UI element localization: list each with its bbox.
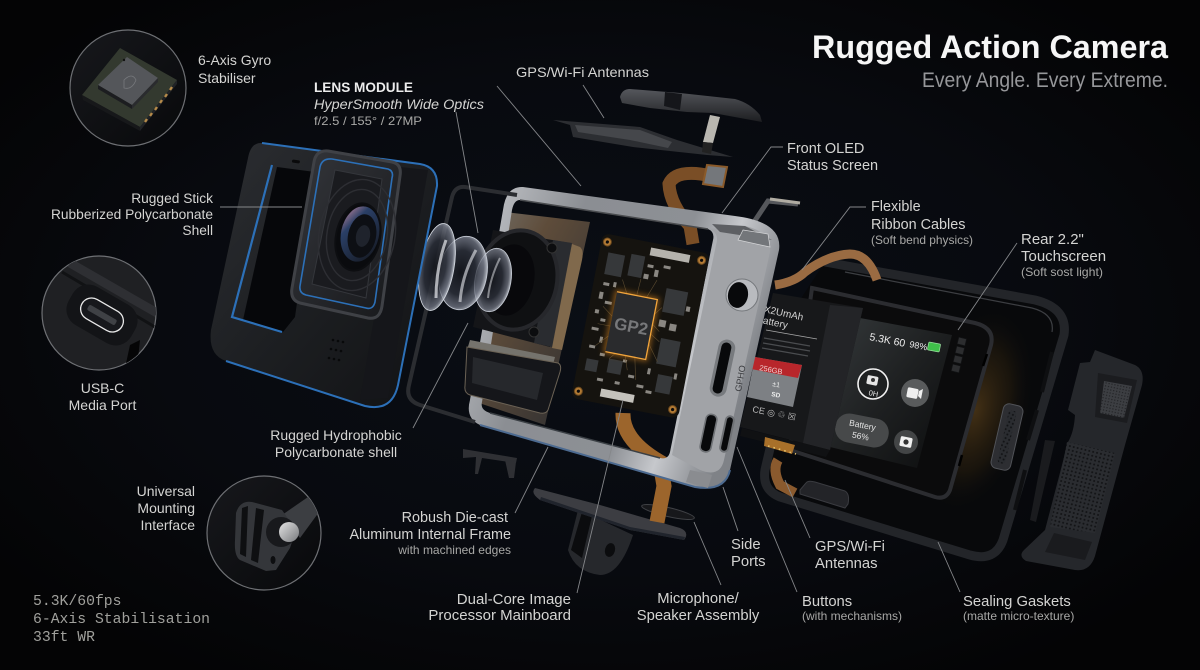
mic ring xyxy=(641,502,695,522)
spec list: 6-Axis Stabilisation xyxy=(33,612,210,628)
screen UI: status text: 5.3K 60 xyxy=(868,331,906,350)
aluminium frame xyxy=(469,187,779,488)
circuit traces xyxy=(588,271,673,383)
clip recess xyxy=(800,481,849,508)
compliance marks: CE ◎ ♲ ☒ xyxy=(752,404,797,422)
side door connector xyxy=(990,403,1024,471)
flex cable: lower xyxy=(623,413,664,522)
shell side band xyxy=(360,167,428,400)
spec list xyxy=(33,594,210,646)
spec list: 5.3K/60fps xyxy=(33,594,122,610)
label: touchscreen: Rear 2.2" xyxy=(1021,231,1084,248)
label: touchscreen xyxy=(1021,231,1106,279)
screen UI: battery pill: Battery xyxy=(848,418,877,433)
label: ribbon cables: Ribbon Cables xyxy=(871,217,965,233)
memory card: ±1 xyxy=(772,381,781,389)
label: side ports: Side xyxy=(731,537,761,553)
lower antenna xyxy=(553,120,733,157)
label: internal frame: Aluminum Internal Frame xyxy=(349,527,511,543)
label: GPS antennas bottom: GPS/Wi-Fi xyxy=(815,539,885,555)
connectors xyxy=(650,247,690,263)
spec list: 33ft WR xyxy=(33,630,95,646)
label: USB-C: Media Port xyxy=(69,397,136,413)
front gasket xyxy=(408,187,517,422)
screen UI: green battery xyxy=(927,342,941,352)
label: microphone: Microphone/ xyxy=(657,591,740,607)
label: internal frame xyxy=(349,510,511,557)
main lens xyxy=(329,199,387,275)
screen UI: battery percent: 98% xyxy=(909,339,928,352)
label: lens module xyxy=(314,79,484,128)
metal clip xyxy=(750,199,800,228)
label: front OLED: Status Screen xyxy=(787,158,878,174)
processor chip: GP2 xyxy=(613,314,650,339)
ICs xyxy=(583,249,695,395)
flex cable: top xyxy=(669,165,727,244)
label: lens module: HyperSmooth Wide Optics xyxy=(314,96,484,112)
label: rugged stick shell: Rugged Stick xyxy=(131,191,213,206)
screen UI: shutter ring xyxy=(858,369,888,399)
label: touchscreen: (Soft sost light) xyxy=(1021,265,1103,279)
battery foot xyxy=(740,428,830,457)
label: mounting: Mounting xyxy=(137,500,195,516)
upper antenna xyxy=(620,89,762,122)
screen UI: shutter ring: 0H xyxy=(868,388,879,399)
label: lens module: f/2.5 / 155° / 27MP xyxy=(314,114,422,128)
OLED module xyxy=(465,340,561,413)
screen display xyxy=(830,318,952,468)
small clip part xyxy=(463,449,517,478)
subtitle: Every Angle. Every Extreme. xyxy=(922,69,1168,92)
SMD parts xyxy=(581,254,697,398)
label: mainboard: Processor Mainboard xyxy=(428,607,571,624)
label: GPS antennas bottom: Antennas xyxy=(815,556,878,572)
rear shell frame xyxy=(765,262,1064,557)
side door grip xyxy=(1021,350,1143,570)
label: side ports: Ports xyxy=(731,554,766,570)
mounting holes xyxy=(574,237,706,414)
OLED display xyxy=(472,357,543,400)
lower connector xyxy=(600,389,635,403)
label: internal frame: Robush Die-cast xyxy=(402,510,508,526)
label: USB-C: USB-C xyxy=(81,380,124,396)
label: gyro: Stabiliser xyxy=(198,70,256,86)
mainboard xyxy=(571,233,710,419)
label: front OLED: Front OLED xyxy=(787,141,864,157)
label: microphone: Speaker Assembly xyxy=(637,608,760,624)
label: ribbon cables: Flexible xyxy=(871,199,921,215)
screen UI: battery pill xyxy=(833,411,891,450)
processor chip xyxy=(603,289,660,362)
flex cable: lower antenna xyxy=(764,437,796,493)
memory card: SD xyxy=(771,391,781,400)
lens element stack xyxy=(413,221,516,315)
memory card: 256GB xyxy=(759,363,783,376)
label: mounting: Universal xyxy=(137,483,195,499)
frame bottom lug xyxy=(686,470,712,488)
lens block xyxy=(292,151,404,318)
screen UI: battery pill: 56% xyxy=(851,430,870,443)
label: gyro: 6-Axis Gyro xyxy=(198,52,271,68)
label: mounting: Interface xyxy=(141,517,195,533)
sensor module xyxy=(465,223,583,413)
label: lens module: LENS MODULE xyxy=(314,79,413,95)
label: sealing gaskets: Sealing Gaskets xyxy=(963,594,1071,610)
rear touchscreen xyxy=(790,288,992,498)
label: rugged stick shell: Rubberized Polycarbonate xyxy=(51,207,213,222)
frame hole xyxy=(726,279,758,311)
label: rugged stick shell: Shell xyxy=(182,223,213,238)
battery label: 5X2UmAh xyxy=(757,303,804,323)
label: sealing gaskets: (matte micro-texture) xyxy=(963,609,1074,623)
USB-C slot xyxy=(708,338,737,398)
GPS antennas xyxy=(553,89,762,157)
screen UI: camera button xyxy=(894,430,918,454)
label: hydrophobic shell: Polycarbonate shell xyxy=(275,444,397,460)
inset: mounting interface xyxy=(207,476,322,590)
shell window xyxy=(243,167,315,332)
label: ribbon cables: (Soft bend physics) xyxy=(871,233,973,247)
battery label line 2: Battery xyxy=(755,314,789,332)
label: buttons xyxy=(802,594,902,623)
screen side buttons xyxy=(951,337,967,373)
label: ribbon cables xyxy=(871,199,973,247)
grip button xyxy=(1095,373,1137,423)
flex cable: ribbon xyxy=(775,254,877,285)
memory card xyxy=(747,357,802,407)
label: buttons: Buttons xyxy=(802,594,852,610)
title: Rugged Action Camera xyxy=(812,29,1168,65)
screen UI: video button xyxy=(901,379,929,407)
metal link xyxy=(703,115,720,143)
label: GPS antennas top: GPS/Wi-Fi Antennas xyxy=(516,64,649,80)
bottom mount xyxy=(533,488,695,575)
speaker grille xyxy=(328,339,344,361)
label: mainboard: Dual-Core Image xyxy=(457,591,571,608)
label: internal frame: with machined edges xyxy=(397,543,511,557)
title block xyxy=(812,29,1168,92)
label: sealing gaskets xyxy=(963,594,1074,623)
inset: 6-axis gyro chip xyxy=(70,30,186,146)
side port slots xyxy=(699,413,735,453)
battery pack xyxy=(740,293,863,457)
label: buttons: (with mechanisms) xyxy=(802,609,902,623)
leader lines xyxy=(220,85,1017,593)
inset: USB-C port xyxy=(42,256,157,370)
label: hydrophobic shell: Rugged Hydrophobic xyxy=(270,427,402,443)
frame top lug xyxy=(738,230,770,247)
front shell xyxy=(211,143,437,407)
engraved mark: GPHO xyxy=(733,364,748,392)
label: touchscreen: Touchscreen xyxy=(1021,248,1106,265)
grip texture xyxy=(1050,442,1115,533)
